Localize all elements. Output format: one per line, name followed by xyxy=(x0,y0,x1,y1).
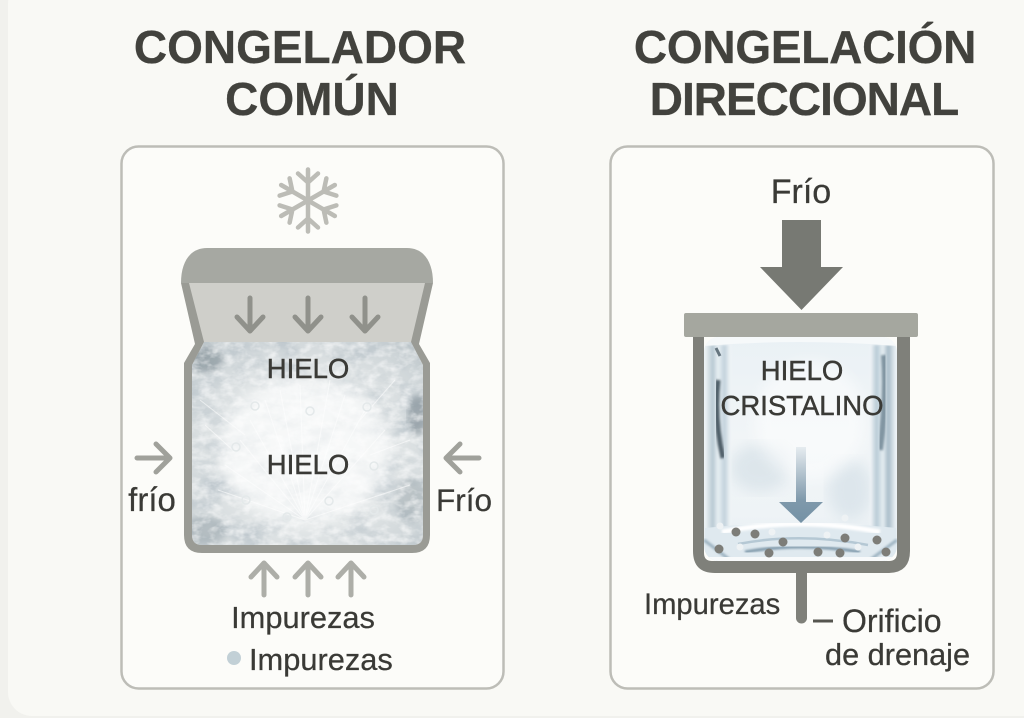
title: congelación direccional: DIRECCIONAL xyxy=(650,73,958,125)
label: hielo cristalino: HIELO xyxy=(761,355,843,386)
label: frío left: frío xyxy=(128,481,176,518)
directional container xyxy=(684,313,918,624)
impurity dots xyxy=(714,514,890,558)
arrows: impurities upward xyxy=(251,563,364,595)
lid xyxy=(181,248,433,283)
ice block: cloudy xyxy=(183,340,428,547)
panel: congelación direccional xyxy=(610,146,994,688)
title: congelador común: CONGELADOR xyxy=(134,21,466,73)
freezer container xyxy=(181,248,433,553)
icon: snowflake xyxy=(276,170,340,232)
label: orificio de drenaje xyxy=(825,603,970,672)
panel: congelador común xyxy=(122,146,504,688)
legend: impurezas: Impurezas xyxy=(249,642,393,677)
label: hielo top: HIELO xyxy=(267,353,349,384)
label: orificio de drenaje: de drenaje xyxy=(825,637,970,672)
arrows: cold from top xyxy=(237,298,378,331)
label: impurezas: Impurezas xyxy=(231,600,375,635)
title: congelador común: COMÚN xyxy=(225,73,399,125)
label: Frío top: Frío xyxy=(771,173,831,211)
cap xyxy=(684,313,918,337)
clear ice block xyxy=(704,337,897,561)
label: orificio de drenaje: Orificio xyxy=(842,603,942,639)
drain pipe xyxy=(796,572,807,624)
label: hielo center: HIELO xyxy=(267,449,349,480)
label: impurezas right: Impurezas xyxy=(644,589,780,621)
arrow: cold from right xyxy=(446,444,479,472)
title: congelación direccional: CONGELACIÓN xyxy=(634,21,976,73)
title: congelación direccional xyxy=(634,21,976,125)
arrow: cold from above xyxy=(760,220,843,310)
leader line: drain xyxy=(813,620,833,622)
container walls xyxy=(181,283,433,553)
arrow: cold from left xyxy=(137,444,170,472)
label: hielo cristalino xyxy=(720,355,884,421)
title: congelador común xyxy=(134,21,466,125)
label: Frío right: Frío xyxy=(436,482,492,518)
arrow: freezing direction xyxy=(779,447,823,523)
funnel interior xyxy=(188,283,426,343)
label: hielo cristalino: CRISTALINO xyxy=(720,390,884,421)
